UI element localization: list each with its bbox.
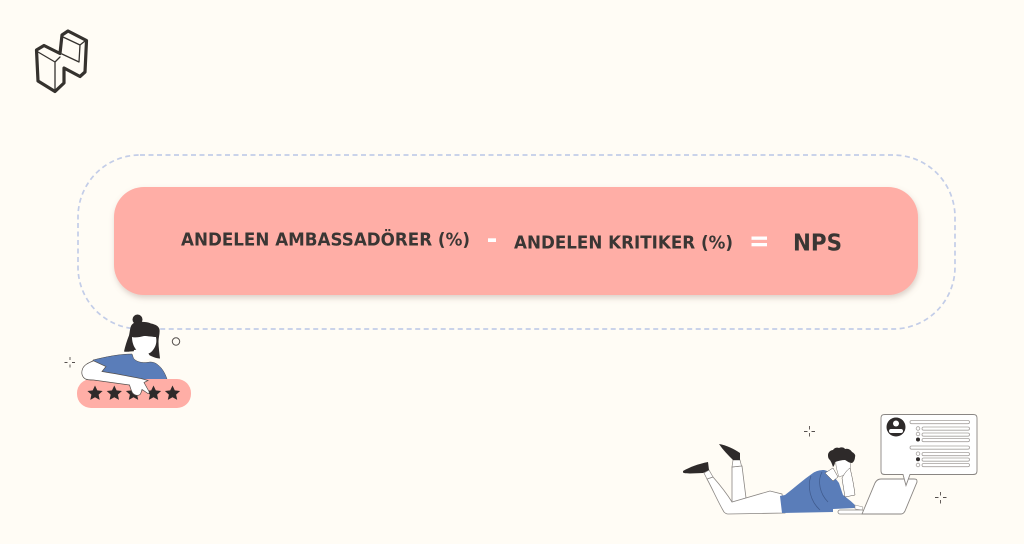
- illustration: woman with star rating: [64, 314, 191, 408]
- hand on keyboard: [855, 505, 863, 510]
- blue body: [780, 470, 855, 513]
- text: share of ambassadors: ANDELEN AMBASSADÖRER (%): [181, 229, 470, 251]
- text: share of critics: ANDELEN KRITIKER (%): [514, 233, 733, 253]
- hair: [828, 447, 855, 467]
- blue shirt: [93, 354, 168, 384]
- stars: [87, 386, 180, 400]
- small thought circle: [172, 338, 180, 345]
- ankle: [704, 470, 713, 479]
- supporting hand: [842, 468, 855, 497]
- laptop screen: [862, 479, 917, 514]
- neck: [133, 349, 151, 362]
- minus sign: [488, 238, 496, 242]
- arm and pointing hand: [82, 360, 149, 395]
- sleeve fold lines: [809, 472, 828, 510]
- hair bun: [132, 314, 142, 324]
- hair: [124, 322, 160, 358]
- illustration: man lying with laptop and survey: [683, 414, 977, 514]
- sparkles: [804, 426, 946, 504]
- face: [836, 458, 851, 477]
- sock: [732, 460, 742, 467]
- equals sign: [752, 236, 767, 246]
- pink rating pill: [77, 379, 191, 408]
- survey speech bubble: [881, 414, 977, 486]
- selected answer dots: [916, 438, 920, 461]
- avatar icon: [886, 418, 906, 436]
- laptop base: [838, 510, 864, 514]
- lying leg: [707, 477, 785, 514]
- logo: [36, 31, 86, 92]
- collar: [825, 468, 838, 481]
- face: [132, 336, 156, 354]
- sparkle: [64, 357, 75, 368]
- survey answer lines: [910, 420, 970, 467]
- raised leg: [732, 466, 746, 503]
- formula panel: [114, 187, 918, 295]
- dashed thought-bubble outline: [78, 155, 955, 329]
- text: NPS: NPS: [793, 229, 842, 257]
- shoes: [683, 462, 709, 473]
